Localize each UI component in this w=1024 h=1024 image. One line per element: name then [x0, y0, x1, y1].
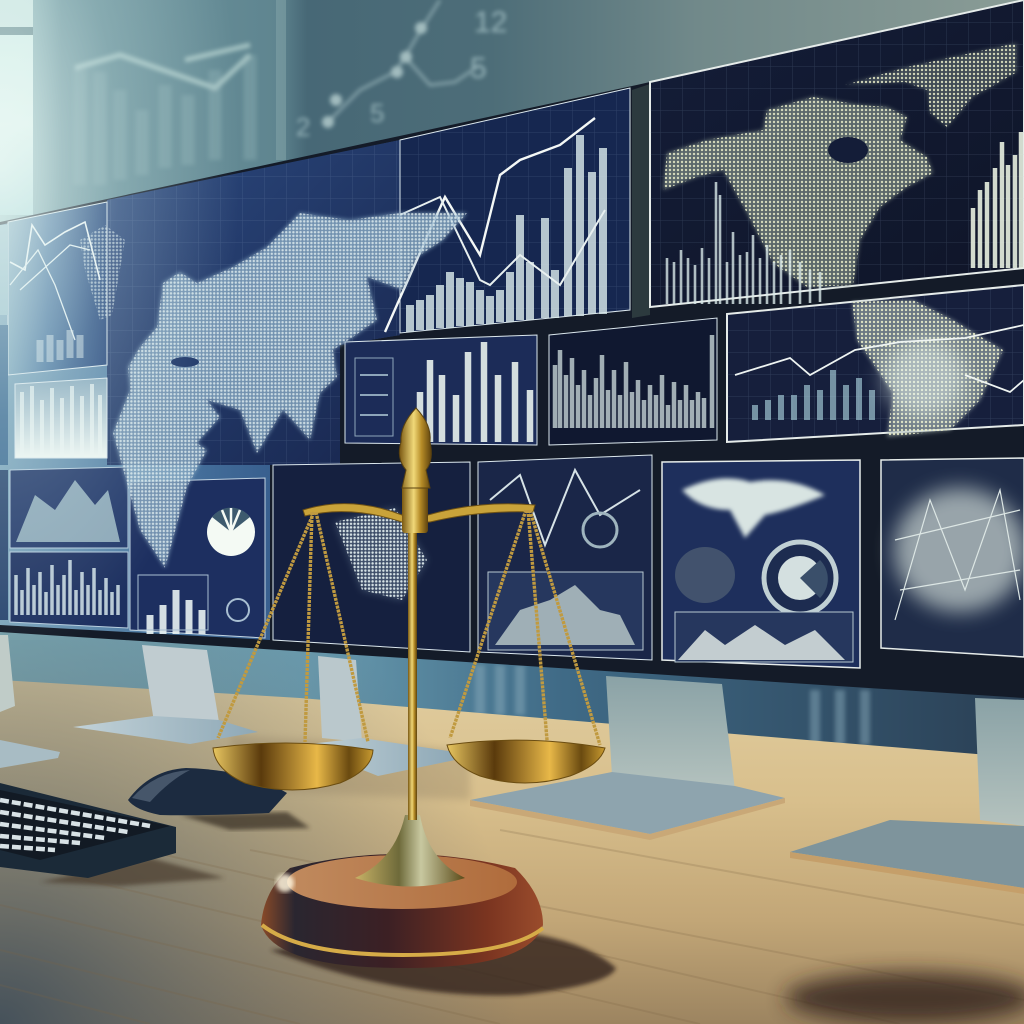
blurred wall charts: 5: [470, 52, 487, 85]
map: dotted continent: [852, 300, 1003, 437]
panel: pie chart and bars: [130, 478, 265, 638]
monitor frames: [0, 0, 1024, 698]
chart: lower left bars: [667, 182, 820, 304]
stand: second: [73, 645, 258, 744]
stand: far left: [0, 635, 60, 768]
panel: right map with line chart: [727, 285, 1024, 442]
desk shadow right: [785, 972, 1024, 1024]
panel: upper bars and lines: [385, 88, 630, 333]
right pan: [447, 740, 605, 783]
background below monitors: [0, 620, 1024, 760]
chart: trend lines: [385, 118, 595, 332]
window glow: [0, 0, 300, 640]
stand: third: [300, 656, 455, 776]
panel: left bars lower: [10, 552, 128, 628]
blurred wall charts: [75, 0, 507, 185]
keyboard: [0, 783, 225, 886]
panel: cloud and gauge: [662, 460, 860, 668]
panel: left mid bars: [15, 378, 107, 458]
stand: fourth: [470, 676, 785, 840]
wooden desk: [0, 500, 1024, 1024]
monitor stands: [0, 635, 1024, 894]
beam: [303, 504, 535, 522]
panel: australia map: [273, 462, 470, 652]
chart: right bars: [973, 132, 1021, 268]
panel: large world map background: [0, 140, 400, 640]
scales of justice: [213, 408, 605, 968]
computer mouse: [128, 768, 310, 830]
blurred wall charts: 2: [296, 112, 310, 142]
panel: centre bars: [345, 335, 537, 445]
panel: upper left line chart: [8, 202, 125, 375]
icon: gauge dial: [764, 542, 836, 614]
blurred wall charts: 12: [474, 6, 507, 39]
wooden base: [261, 854, 543, 968]
central clasp: [402, 485, 428, 533]
right chains: [450, 510, 600, 752]
pole: [408, 530, 417, 820]
panel: upper right map: [650, 0, 1024, 307]
panel: left edge strip: [0, 225, 8, 620]
blurred wall charts: 5: [370, 98, 384, 128]
panel: left mountain chart: [10, 467, 128, 548]
map: dotted Eurasia and Africa: [113, 213, 467, 568]
panel: network graph: [881, 458, 1024, 657]
desk shadow of base: [270, 935, 616, 995]
stand: fifth: [790, 698, 1024, 894]
left pan: [213, 743, 373, 790]
icon: pie chart: [207, 508, 255, 556]
panel: centre noisy chart: [549, 318, 717, 445]
map: dotted continents: [663, 43, 1017, 287]
map: cloud shape: [682, 478, 825, 538]
chart: rising bars: [410, 135, 603, 332]
back wall: [0, 0, 1024, 700]
finial: [399, 408, 431, 488]
panel: line and mountain chart: [478, 455, 652, 660]
left chains: [218, 512, 368, 742]
pole foot: [355, 815, 465, 886]
